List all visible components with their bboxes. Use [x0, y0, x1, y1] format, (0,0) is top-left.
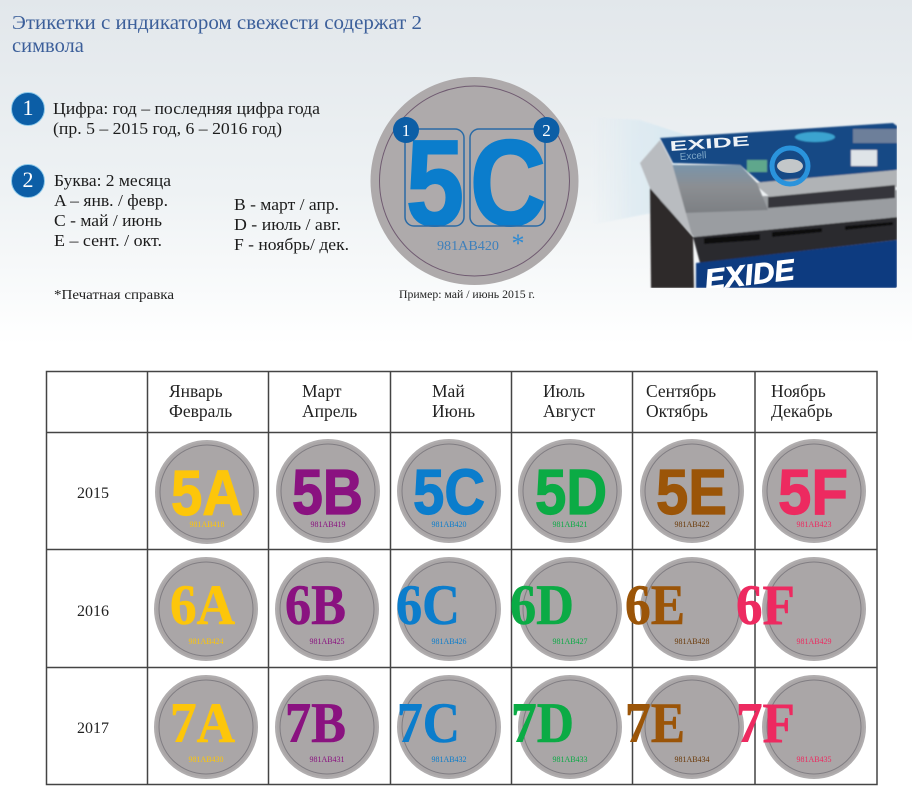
explanation: digit [53, 99, 320, 138]
row 2017 labels: 7B [285, 692, 346, 755]
row 2015 labels: 5F [778, 456, 848, 528]
row 2016 labels: 981AB427 [552, 637, 588, 646]
row 2016 labels: 981AB425 [309, 637, 345, 646]
row years [77, 485, 109, 737]
row 2015 labels: 981AB419 [310, 520, 346, 529]
table header: Февраль [169, 401, 232, 421]
row 2015 labels: 981AB423 [796, 520, 832, 529]
explanation: letter months, left column: C - май / июнь [54, 211, 162, 230]
table header: Июль [543, 381, 585, 401]
table header: Январь [169, 381, 223, 401]
row 2016 labels: 981AB429 [796, 637, 832, 646]
row 2017 labels: 7A [170, 692, 235, 755]
explanation: letter months, right column: D - июль / авг. [234, 215, 341, 234]
table header: Октябрь [646, 401, 708, 421]
row 2016 labels: 981AB426 [431, 637, 467, 646]
table grid [46, 371, 877, 785]
row 2017 labels [155, 676, 865, 778]
caption: Пример: май / июнь 2015 г. [399, 289, 535, 301]
row 2016 labels: 981AB428 [674, 637, 710, 646]
explanation: letter months, right column: B - март / апр. [234, 195, 339, 214]
row 2015 labels [156, 440, 865, 543]
battery photo: Excell [679, 150, 707, 163]
row 2015 labels: 5D [535, 456, 607, 528]
row 2015 labels: 981AB421 [552, 520, 588, 529]
row 2016 labels: 6D [510, 574, 574, 637]
row 2017 labels: 981AB431 [309, 755, 345, 764]
large example label 5C [370, 77, 578, 285]
large example label 5C: 1 [402, 121, 410, 140]
large example label 5C: 981AB420 [437, 239, 499, 254]
row 2015 labels: 981AB420 [431, 520, 467, 529]
table header: Декабрь [771, 401, 833, 421]
title: символа [12, 35, 84, 57]
title: Этикетки с индикатором свежести содержат 2 [12, 12, 422, 34]
row years: 2015 [77, 485, 109, 502]
explanation: letter months, right column: F - ноябрь/ дек. [234, 235, 349, 254]
table header: Ноябрь [771, 381, 826, 401]
row 2015 labels: 981AB418 [189, 520, 225, 529]
explanation: letter months, left column: A – янв. / февр. [54, 191, 168, 210]
explanation: digit: (пр. 5 – 2015 год, 6 – 2016 год) [53, 119, 282, 138]
row 2017 labels: 7C [397, 692, 460, 755]
table header: Сентябрь [646, 381, 716, 401]
table header: Апрель [302, 401, 357, 421]
large example label 5C: C [470, 115, 546, 251]
row 2017 labels: 981AB433 [552, 755, 588, 764]
battery photo: EXIDE [669, 132, 750, 154]
badge 1 [12, 92, 44, 126]
table header: Июнь [432, 401, 475, 421]
large example label 5C: 2 [542, 121, 551, 140]
explanation: letter months, left column: Буква: 2 месяца [54, 171, 171, 190]
row 2015 labels: 5C [413, 456, 485, 528]
badge 2: 2 [22, 167, 34, 192]
badge 2 [12, 164, 44, 198]
table header: Август [543, 401, 596, 421]
row 2016 labels: 6E [625, 574, 685, 637]
row 2015 labels: 5E [656, 456, 727, 528]
light beam [590, 117, 692, 225]
row 2017 labels: 7E [625, 692, 685, 755]
table header: Май [432, 381, 465, 401]
large example label 5C: 5 [406, 115, 464, 251]
row 2015 labels: 981AB422 [674, 520, 710, 529]
large example label 5C: * [512, 229, 524, 258]
battery photo: EXIDE [703, 254, 798, 297]
explanation: letter months, left column [54, 171, 171, 250]
table header [169, 381, 833, 421]
badge 1: 1 [22, 95, 34, 120]
table header: Март [302, 381, 342, 401]
row 2017 labels: 981AB430 [188, 755, 224, 764]
row 2016 labels [155, 558, 865, 660]
row 2017 labels: 7D [511, 692, 574, 755]
title [12, 12, 422, 57]
row 2016 labels: 6A [170, 574, 235, 637]
explanation: digit: Цифра: год – последняя цифра года [53, 99, 320, 118]
row 2016 labels: 981AB424 [188, 637, 224, 646]
battery photo [640, 123, 897, 297]
row 2017 labels: 981AB432 [431, 755, 467, 764]
explanation: letter months, left column: E – сент. / окт. [54, 231, 162, 250]
row years: 2017 [77, 720, 109, 737]
row 2015 labels: 5B [292, 456, 363, 528]
row 2016 labels: 6F [736, 574, 795, 637]
footnote: *Печатная справка [54, 288, 175, 303]
row 2017 labels: 981AB434 [674, 755, 710, 764]
row 2017 labels: 981AB435 [796, 755, 832, 764]
row 2015 labels: 5A [171, 457, 243, 529]
row 2017 labels: 7F [736, 692, 795, 755]
row years: 2016 [77, 603, 109, 620]
row 2016 labels: 6C [396, 574, 460, 637]
row 2016 labels: 6B [285, 574, 346, 637]
explanation: letter months, right column [234, 195, 349, 254]
